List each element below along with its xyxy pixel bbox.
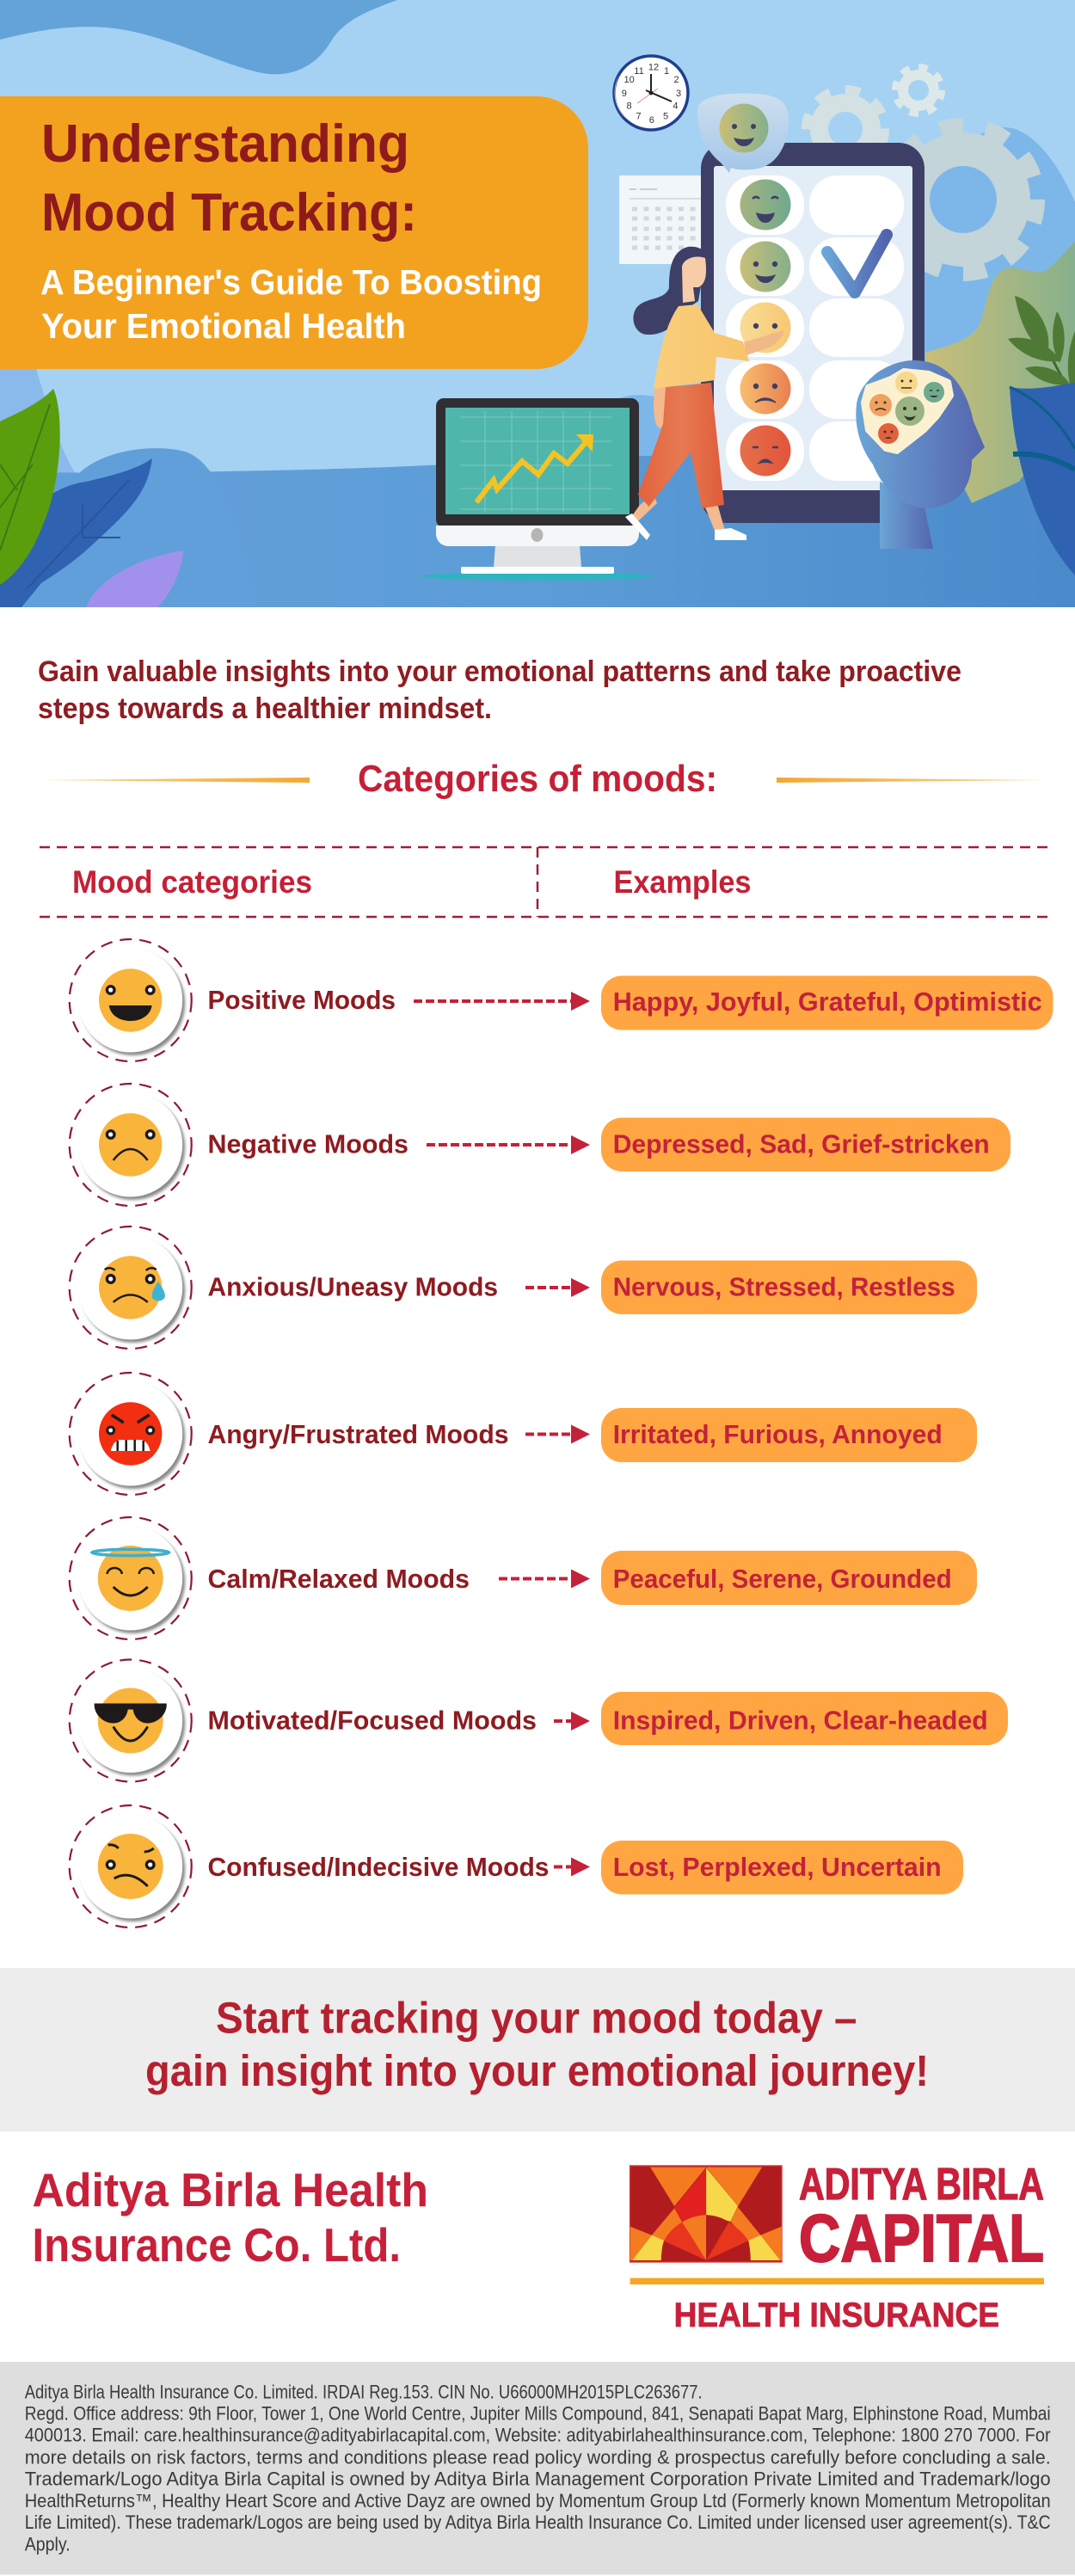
big gear [889,126,1037,274]
gears [806,67,1037,274]
footer disclaimer: Trademark/Logo Aditya Birla Capital is owned by Aditya Birla Management Corporation Private Limited and Trademark/logo [25,2468,1051,2490]
clock: 3 [676,89,681,99]
left mound [0,448,258,607]
title panel [0,96,588,369]
back hand [654,387,667,428]
title: Mood Tracking: [41,183,417,243]
neck [880,482,933,549]
legs [631,495,725,531]
example pill: Inspired, Driven, Clear-headed [613,1705,988,1736]
right big blue leaf [1010,383,1075,575]
title [41,114,417,243]
face [682,256,706,303]
row: positive moods [70,939,1054,1061]
company name: Aditya Birla Health [33,2163,428,2216]
arrow [554,1858,590,1877]
left leaves [0,389,183,607]
stand shadow [421,572,654,581]
clock: 7 [636,112,642,122]
icon: happy face [70,939,192,1061]
blue leaf [0,458,152,607]
footer disclaimer: Aditya Birla Health Insurance Co. Limited. IRDAI Reg.153. CIN No. U66000MH2015PLC263677. [25,2381,703,2402]
logo: Aditya Birla Capital [630,2160,1044,2334]
clock: 11 [634,66,644,77]
icon: angry face [70,1373,192,1495]
purple leaf [86,550,183,607]
icon: sunglasses face [70,1660,192,1782]
call to action band: Start tracking your mood today – [216,1994,857,2042]
example pill [601,1692,1008,1745]
clock: 9 [622,89,627,99]
clock [614,56,688,130]
green foliage blob [925,242,1075,503]
row: calm moods: Calm/Relaxed Moods [208,1564,470,1594]
brain mood faces [869,372,944,444]
arrow [525,1278,590,1297]
icon: sad face [70,1084,192,1206]
screen [714,166,912,490]
subtitle [40,262,542,346]
right blue hill [924,127,1075,430]
row: motivated moods: Motivated/Focused Moods [208,1705,537,1736]
footer disclaimer [0,2362,1075,2575]
table header [40,847,1047,917]
row: positive moods: Positive Moods [208,985,396,1015]
logo mark [630,2166,782,2262]
arrow [427,1135,590,1154]
subtitle: A Beginner's Guide To Boosting [40,262,542,302]
shoes [625,513,746,540]
row: angry moods [70,1373,977,1495]
clock: 5 [663,112,668,122]
intro text: steps towards a healthier mindset. [38,692,492,725]
rating pills [726,175,904,481]
row: anxious moods: Anxious/Uneasy Moods [208,1271,498,1302]
arm and hand [744,330,783,355]
intro text [38,655,961,725]
example pill: Nervous, Stressed, Restless [613,1271,955,1302]
footer disclaimer: Apply. [25,2533,71,2554]
arrow [499,1569,590,1588]
green leaf [0,389,60,585]
row: confused moods: Confused/Indecisive Moods [208,1852,549,1882]
icon: confused face [70,1805,192,1927]
row: motivated moods [70,1660,1008,1782]
health insurance label: HEALTH INSURANCE [674,2296,999,2334]
head with brain faces [856,360,985,549]
mood face 1 [740,179,791,231]
orange panel [0,96,588,369]
trousers [638,383,724,508]
calendar [619,175,710,264]
medium gear [806,89,885,169]
shirt [654,304,749,389]
arrow [554,1712,590,1731]
hero illustration background [0,0,1075,607]
section heading: categories of moods [40,758,1046,800]
example pill: Irritated, Furious, Annoyed [613,1419,943,1449]
clock: 8 [627,101,632,111]
row: calm moods [70,1517,977,1639]
section heading: categories of moods: Categories of moods: [358,758,717,800]
monitor base [436,526,639,546]
speech bubble with face [697,93,789,173]
logo wordmark [799,2160,1044,2276]
example pill: Depressed, Sad, Grief-stricken [613,1128,990,1159]
gold bar [630,2278,1044,2284]
power button [531,528,544,542]
icon: halo face [70,1517,192,1639]
top-left wave blob [0,0,397,74]
call to action band [0,1968,1075,2131]
small hill behind monitor [612,395,679,456]
clock: 12 [648,62,659,72]
brain [863,371,951,452]
clock: 1 [664,66,669,77]
woman figure [625,247,783,540]
row: negative moods: Negative Moods [208,1128,408,1159]
phone [701,143,924,523]
title: Understanding [41,114,409,174]
rising line arrow [476,434,593,502]
clock: 2 [673,75,679,85]
row: confused moods [70,1805,963,1927]
example pill: Happy, Joyful, Grateful, Optimistic [613,987,1042,1017]
mood face 2 [740,241,791,292]
example pill: Peaceful, Serene, Grounded [613,1564,952,1594]
company name [33,2163,428,2272]
call to action band: gain insight into your emotional journey! [145,2046,929,2095]
row: negative moods [70,1084,1010,1206]
monitor with chart [421,398,654,581]
mood face 3 [740,303,791,353]
example pill [601,1261,977,1314]
plant leaves [1008,296,1075,403]
clock: 6 [649,115,654,126]
icon: crying face [70,1227,192,1349]
row: anxious moods [70,1227,977,1349]
example pill [601,1118,1010,1171]
subtitle: Your Emotional Health [41,306,406,346]
hair [633,247,707,335]
ground [0,446,1075,607]
monitor foot [461,567,614,574]
clock: 4 [673,101,678,111]
small gear [895,67,942,114]
arrow [525,1424,590,1443]
mood face 4 [740,363,791,415]
mood face 5 [740,425,791,476]
table header: Examples [614,864,752,900]
row: angry moods: Angry/Frustrated Moods [208,1419,509,1449]
check mark [827,235,887,292]
example pill: Lost, Perplexed, Uncertain [613,1852,942,1882]
table header: Mood categories [72,864,312,900]
phone body [701,143,924,523]
company name: Insurance Co. Ltd. [33,2218,401,2272]
monitor frame [436,398,639,527]
head [856,360,985,508]
footer disclaimer: more details on risk factors, terms and conditions please read policy wording & prospectus carefully before concluding a sale. [25,2447,1051,2468]
example pill [601,975,1053,1030]
example pill [601,1551,977,1605]
screen [445,408,630,514]
left hill [0,369,82,516]
clock: 10 [624,75,635,85]
intro text: Gain valuable insights into your emotional patterns and take proactive [38,655,961,688]
example pill [601,1408,977,1462]
arrow [414,992,590,1011]
monitor stand [494,545,581,568]
example pill [601,1841,963,1894]
